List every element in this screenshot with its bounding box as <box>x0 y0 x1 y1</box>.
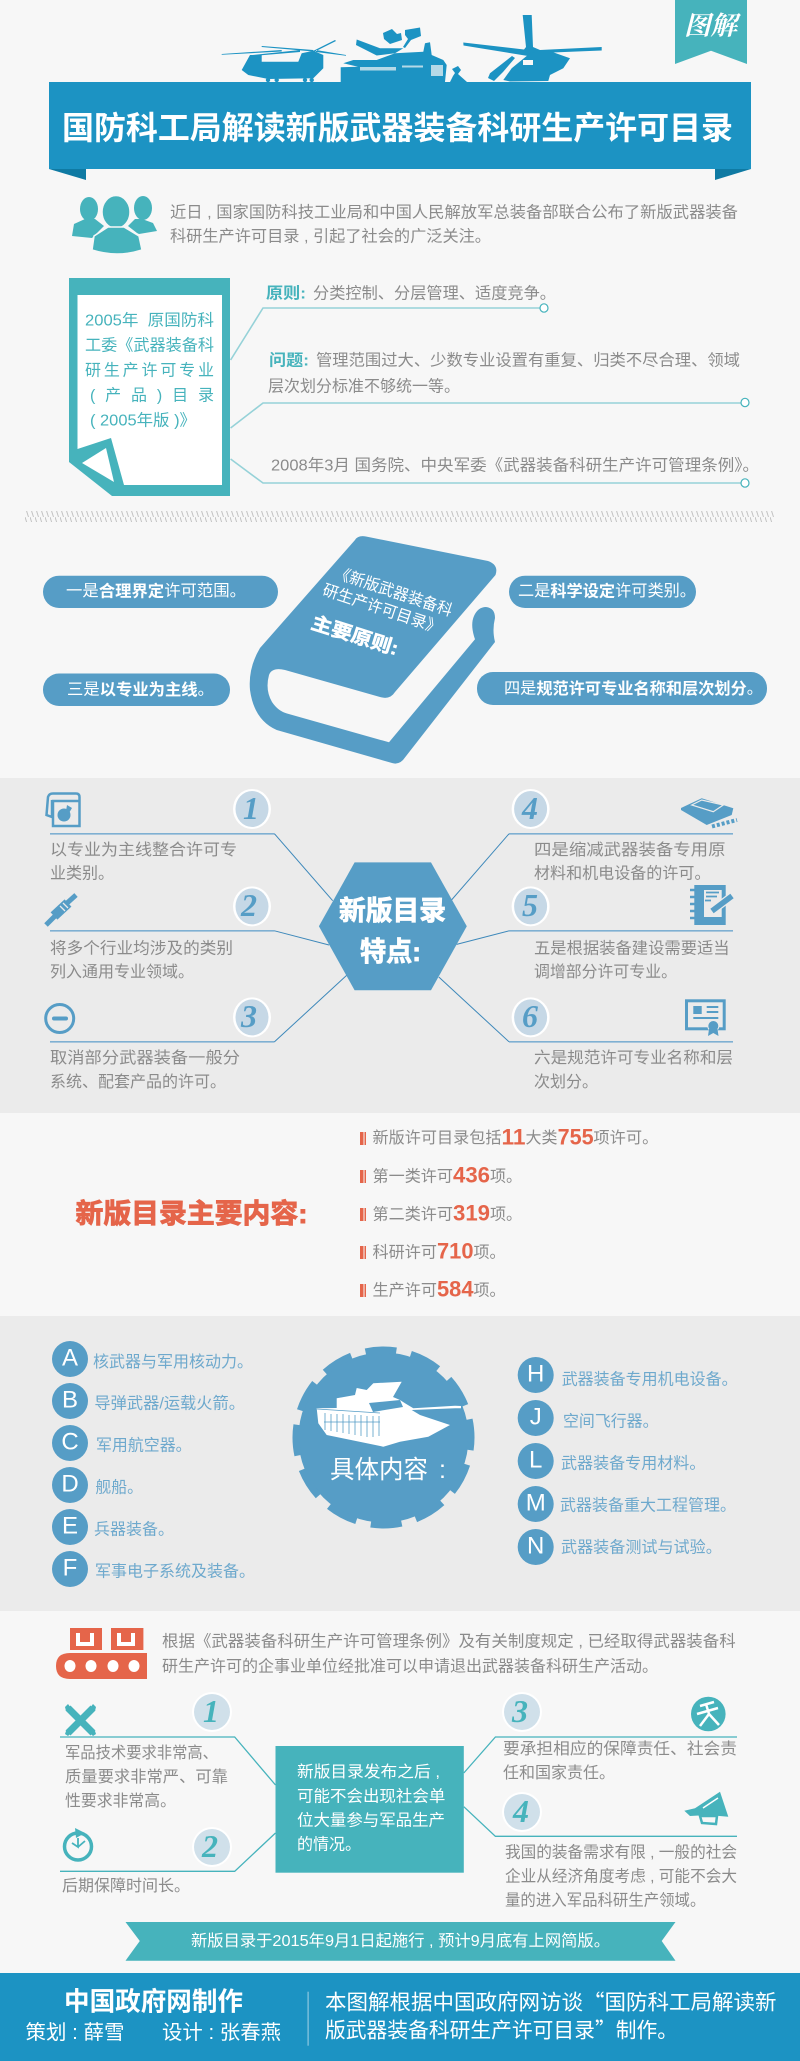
row: research: 710 <box>437 1238 474 1264</box>
item L: 武器装备专用材料。 <box>561 1454 705 1472</box>
item M: M <box>526 1490 546 1516</box>
footer: 本图解根据中国政府网访谈“国防科工局解读新 <box>325 1987 776 2017</box>
panel: 2005 note: ( 2005年版 )》 <box>90 412 196 430</box>
gear with tank: 具体内容 <box>330 1456 428 1484</box>
footer <box>0 1973 800 2061</box>
row: class two: 第二类许可 <box>372 1206 453 1224</box>
panel: specific contents <box>0 1316 800 1611</box>
helicopter right <box>463 15 602 82</box>
callout: centre box <box>276 1746 464 1873</box>
icon: book <box>250 536 496 764</box>
reason 3: 任和国家责任。 <box>503 1764 615 1782</box>
ribbon: effective date: 新版目录于2015年9月1日起施行 , 预计9月底有上网简版。 <box>191 1932 610 1950</box>
row: total: 新版许可目录包括 <box>372 1129 502 1147</box>
text: principle: 原则: <box>266 284 306 302</box>
item 2 <box>46 886 271 981</box>
row: class one: 项。 <box>490 1168 522 1186</box>
item 4: 4 <box>521 790 538 826</box>
connector: principle <box>231 304 548 360</box>
item J: 空间飞行器。 <box>563 1412 658 1430</box>
connector: 2008 regulation <box>231 459 749 487</box>
item 2: 将多个行业均涉及的类别 <box>50 940 233 958</box>
text: principle: 分类控制、分层管理、适度竞争。 <box>313 284 556 302</box>
callout: centre box: 可能不会出现社会单 <box>297 1788 445 1806</box>
gear with tank <box>280 1334 487 1541</box>
row: research <box>372 1238 506 1264</box>
pill: categories: 二是科学设定许可类别。 <box>518 581 696 600</box>
row: total: 11 <box>502 1124 526 1150</box>
item J: J <box>530 1404 542 1430</box>
item 4: 材料和机电设备的许可。 <box>534 864 710 882</box>
item L <box>518 1443 705 1479</box>
footer: 策划 : 薛雪 <box>26 2021 124 2044</box>
connectors: to centre box <box>60 1737 737 1871</box>
reason 1: 质量要求非常严、可靠 <box>65 1768 228 1786</box>
item C <box>52 1425 192 1461</box>
row: class two: 项。 <box>490 1206 522 1224</box>
row: production: 项。 <box>474 1282 506 1300</box>
item B: B <box>62 1386 78 1414</box>
item 5: 五是根据装备建设需要适当 <box>534 940 730 958</box>
reason 4: 企业从经济角度考虑 , 可能不会大 <box>505 1868 737 1886</box>
item 1: 1 <box>243 790 259 826</box>
icon: book: 研生产许可目录》 <box>320 581 444 637</box>
panel: 2005 note: 研生产许可专业 <box>85 362 214 380</box>
item D: 舰船。 <box>95 1478 143 1496</box>
item H <box>518 1357 738 1393</box>
reason 1: 军品技术要求非常高、 <box>65 1744 218 1762</box>
intro text <box>170 204 738 246</box>
pill: naming: 四是规范许可专业名称和层次划分。 <box>504 678 763 698</box>
panel: 2005 note <box>69 278 230 496</box>
item 6: 6 <box>522 998 538 1034</box>
item 4: 四是缩减武器装备专用原 <box>534 841 726 859</box>
text: problem: 问题: <box>269 352 309 370</box>
item J <box>518 1400 658 1436</box>
item M: 武器装备重大工程管理。 <box>560 1496 736 1514</box>
item L: L <box>529 1446 542 1474</box>
pill: scope <box>43 576 278 608</box>
tag: 图解 <box>675 0 747 64</box>
text: problem: 管理范围过大、少数专业设置有重复、归类不尽合理、领域 <box>316 352 740 370</box>
icon: book: 《新版武器装备科 <box>332 564 455 620</box>
row: class one <box>372 1162 522 1188</box>
icon: people <box>72 196 157 254</box>
row: total: 755 <box>558 1124 594 1150</box>
item N <box>518 1529 722 1565</box>
item A <box>52 1341 253 1377</box>
row: class one: 436 <box>453 1162 490 1188</box>
item 5 <box>512 885 732 981</box>
item B: 导弹武器/运载火箭。 <box>94 1394 245 1412</box>
reason 3: 3 <box>511 1693 528 1729</box>
hexagon: features title: 特点: <box>360 937 421 967</box>
text: 2008 regulation: 2008年3月 国务院、中央军委《武器装备科研生产许可管理条例》。 <box>271 456 759 474</box>
callout: centre box: 的情况。 <box>297 1836 361 1854</box>
panel: 2005 note: ( 产 品 ) 目 录 <box>90 386 214 404</box>
helicopter left <box>222 40 346 82</box>
text: exit rule <box>162 1632 736 1676</box>
item 2: 列入通用专业领域。 <box>50 963 194 981</box>
item 6: 次划分。 <box>534 1073 598 1091</box>
item D <box>52 1467 143 1503</box>
gear with tank: : <box>439 1456 446 1484</box>
item A: 核武器与军用核动力。 <box>93 1353 253 1371</box>
row: production <box>372 1276 506 1302</box>
row: total <box>372 1124 658 1150</box>
row: class one: 第一类许可 <box>372 1168 453 1186</box>
icon: conveyor <box>56 1628 147 1679</box>
item 2: 2 <box>240 887 257 923</box>
item C: C <box>61 1428 79 1456</box>
item E: 兵器装备。 <box>94 1520 174 1538</box>
title banner: 国防科工局解读新版武器装备科研生产许可目录 <box>62 110 733 146</box>
reason 4: 我国的装备需求有限 , 一般的社会 <box>505 1844 737 1862</box>
item N: 武器装备测试与试验。 <box>561 1538 722 1556</box>
callout: centre box: 新版目录发布之后 , <box>297 1763 440 1781</box>
item N: N <box>527 1532 544 1560</box>
row: production: 584 <box>437 1276 474 1302</box>
pill: main line <box>43 674 230 706</box>
pill: main line: 三是以专业为主线。 <box>67 680 214 698</box>
item D: D <box>61 1470 79 1498</box>
title banner <box>49 82 751 180</box>
reason 4: 4 <box>512 1793 529 1829</box>
pill: categories <box>509 576 696 608</box>
panel: 2005 note: 工委《武器装备科 <box>85 336 214 354</box>
footer: 设计 : 张春燕 <box>162 2021 281 2044</box>
text: problem <box>268 352 740 396</box>
item 6: 六是规范许可专业名称和层 <box>534 1049 733 1067</box>
row: class two: 319 <box>453 1200 490 1226</box>
row: total: 大类 <box>526 1129 558 1147</box>
reason 2: 后期保障时间长。 <box>62 1877 190 1895</box>
reason 3 <box>502 1692 737 1782</box>
panel: features <box>0 778 800 1113</box>
text: exit rule: 研生产许可的企事业单位经批准可以申请退出武器装备科研生产活动。 <box>162 1658 658 1676</box>
hexagon: features title: 新版目录 <box>339 896 446 926</box>
callout: centre box: 位大量参与军品生产 <box>297 1812 445 1830</box>
item H: 武器装备专用机电设备。 <box>562 1370 738 1388</box>
pill: scope: 一是合理界定许可范围。 <box>66 581 246 600</box>
footer: 版武器装备科研生产许可目录”制作。 <box>325 2014 678 2044</box>
reason 1 <box>65 1692 232 1810</box>
item A: A <box>62 1344 78 1372</box>
reason 4 <box>502 1792 737 1910</box>
intro text: 科研生产许可目录 , 引起了社会的广泛关注。 <box>170 228 491 246</box>
tank <box>341 28 467 82</box>
hexagon: features title <box>319 862 467 990</box>
connector: problem <box>231 398 749 428</box>
row: research: 科研许可 <box>372 1244 437 1262</box>
list: license counts <box>360 1124 658 1302</box>
item M <box>518 1486 736 1522</box>
item F: 军事电子系统及装备。 <box>95 1562 255 1580</box>
row: total: 项许可。 <box>593 1129 658 1147</box>
item 1 <box>46 789 271 882</box>
item 3: 取消部分武器装备一般分 <box>50 1049 240 1067</box>
item 1: 以专业为主线整合许可专 <box>50 841 237 859</box>
tag: 图解: 图解 <box>684 12 741 40</box>
item 6 <box>512 997 733 1091</box>
illustration: military vehicles silhouette <box>222 15 602 82</box>
panel: 2005 note: 2005年 原国防科 <box>85 312 214 330</box>
item F <box>52 1551 255 1587</box>
reason 1: 性要求非常高。 <box>65 1792 176 1810</box>
reason 1: 1 <box>203 1693 219 1729</box>
item E: E <box>62 1512 78 1540</box>
item 5: 5 <box>522 887 538 923</box>
item 3 <box>46 997 271 1091</box>
item 3: 系统、配套产品的许可。 <box>50 1073 226 1091</box>
item B <box>52 1383 245 1419</box>
item 1: 业类别。 <box>50 864 114 882</box>
intro text: 近日 , 国家国防科技工业局和中国人民解放军总装备部联合公布了新版武器装备 <box>170 204 738 222</box>
text: exit rule: 根据《武器装备科研生产许可管理条例》及有关制度规定 , 已经取得武器装备科 <box>162 1632 736 1650</box>
reason 4: 量的进入军品科研生产领域。 <box>505 1892 705 1910</box>
item F: F <box>63 1554 77 1582</box>
item C: 军用航空器。 <box>96 1436 192 1454</box>
icon: book: 主要原则: <box>309 612 401 660</box>
row: research: 项。 <box>474 1244 506 1262</box>
reason 2: 2 <box>201 1828 218 1864</box>
ribbon: effective date <box>126 1922 676 1961</box>
pill: naming <box>477 672 767 705</box>
reason 2 <box>62 1827 232 1895</box>
item H: H <box>527 1360 544 1388</box>
text: problem: 层次划分标准不够统一等。 <box>268 378 460 396</box>
row: production: 生产许可 <box>372 1282 437 1300</box>
item 5: 调增部分许可专业。 <box>534 963 677 981</box>
footer: 中国政府网制作 <box>64 1987 243 2017</box>
reason 3: 要承担相应的保障责任、社会责 <box>503 1739 737 1758</box>
item 4 <box>512 789 737 882</box>
item 3: 3 <box>240 998 257 1034</box>
heading: main contents: 新版目录主要内容: <box>76 1199 308 1229</box>
row: class two <box>372 1200 522 1226</box>
item E <box>52 1509 174 1545</box>
